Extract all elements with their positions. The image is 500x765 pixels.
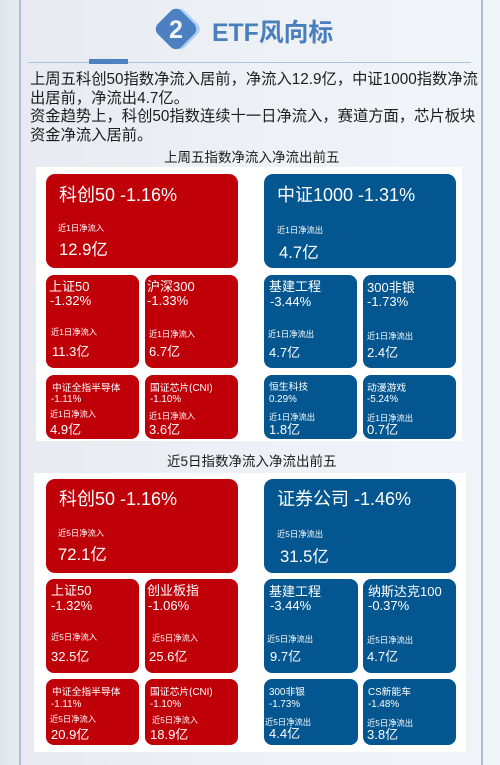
card: 中证1000 1-day: 中证1000 -1.31% [277, 185, 415, 205]
card: 基建工程 5-day: 基建工程 [269, 584, 321, 599]
card: 基建工程 1-day: -3.44% [270, 294, 311, 309]
card: 动漫游戏 1-day [363, 375, 456, 439]
card: 国证芯片 5-day: 18.9亿 [150, 727, 188, 742]
card: 沪深300 1-day [145, 275, 238, 368]
card: 300非银 5-day: 近5日净流出 [265, 717, 311, 727]
summary text: 资金净流入居前。 [30, 127, 152, 144]
card: 沪深300 1-day: 近1日净流入 [149, 329, 195, 339]
card: 300非银 1-day: 近1日净流出 [367, 331, 413, 341]
card: 上证50 1-day: -1.32% [50, 293, 91, 308]
card: 纳斯达克100 5-day: 纳斯达克100 [368, 584, 442, 599]
card: 中证全指半导体 1-day: 4.9亿 [50, 422, 81, 437]
card: 动漫游戏 1-day: 近1日净流出 [367, 413, 413, 423]
summary text: 出居前，净流出4.7亿。 [30, 90, 189, 107]
card: 上证50 5-day [46, 579, 139, 673]
card: 中证全指半导体 5-day [46, 679, 139, 745]
card: 纳斯达克100 5-day [363, 579, 456, 673]
summary text [30, 70, 478, 144]
card: CS新能车 5-day [363, 679, 456, 745]
card: CS新能车 5-day: 近5日净流出 [367, 718, 413, 728]
card: 国证芯片 1-day: 近1日净流入 [149, 411, 195, 421]
card: 上证50 5-day: -1.32% [51, 598, 92, 613]
card: 创业板指 5-day [145, 579, 238, 673]
card: 300非银 1-day [363, 275, 456, 368]
card: 科创50 5-day: 近5日净流入 [58, 528, 104, 538]
card: 上证50 1-day: 上证50 [49, 279, 89, 294]
card: 中证1000 1-day [264, 174, 456, 268]
card: 300非银 5-day: -1.73% [269, 699, 300, 710]
card: 300非银 5-day: 300非银 [269, 687, 305, 698]
card: 上证50 1-day [46, 275, 139, 368]
card: 上证50 5-day: 32.5亿 [51, 649, 89, 664]
card: CS新能车 5-day: 3.8亿 [367, 727, 398, 742]
card: 创业板指 5-day: 近5日净流入 [152, 633, 198, 643]
card: 中证1000 1-day: 近1日净流出 [277, 225, 323, 235]
card: 中证全指半导体 1-day: 近1日净流入 [50, 409, 96, 419]
card: 创业板指 5-day: 25.6亿 [149, 649, 187, 664]
card: 中证全指半导体 1-day: -1.11% [51, 394, 81, 405]
panel: last Friday flows [36, 167, 462, 441]
card: 国证芯片 5-day: 近5日净流入 [152, 715, 198, 725]
card: 上证50 1-day: 近1日净流入 [51, 327, 97, 337]
card: 国证芯片 1-day: 国证芯片(CNI) [150, 383, 213, 394]
card: 300非银 5-day [264, 679, 358, 745]
card: 上证50 5-day: 近5日净流入 [51, 632, 97, 642]
card: 沪深300 1-day: -1.33% [147, 293, 188, 308]
icon: number 2 diamond [156, 8, 200, 50]
card: 基建工程 1-day: 近1日净流出 [268, 329, 314, 339]
card: 证券公司 5-day: 近5日净流出 [277, 529, 323, 539]
card: 中证全指半导体 5-day: 中证全指半导体 [52, 687, 121, 698]
card: 创业板指 5-day: 创业板指 [147, 583, 199, 598]
summary text: 资金趋势上，科创50指数连续十一日净流入，赛道方面，芯片板块 [30, 108, 475, 125]
card: 恒生科技 1-day: 恒生科技 [269, 382, 308, 393]
card: 国证芯片 5-day: 国证芯片(CNI) [150, 687, 213, 698]
card: 纳斯达克100 5-day: 近5日净流出 [367, 635, 413, 645]
card: 中证全指半导体 5-day: 20.9亿 [51, 727, 89, 742]
card: 恒生科技 1-day [264, 375, 357, 439]
card: 科创50 5-day: 72.1亿 [58, 545, 107, 564]
card: 基建工程 5-day [264, 579, 358, 673]
card: 科创50 5-day [46, 479, 238, 573]
card: 中证全指半导体 1-day: 中证全指半导体 [52, 383, 121, 394]
title: ETF风向标 [212, 20, 333, 47]
card: 基建工程 5-day: -3.44% [270, 598, 311, 613]
heading: 5-day top five: 近5日指数净流入净流出前五 [167, 454, 337, 469]
card: 恒生科技 1-day: 0.29% [269, 394, 297, 405]
card: 基建工程 1-day: 基建工程 [269, 279, 321, 294]
card: 动漫游戏 1-day: 0.7亿 [367, 422, 398, 437]
icon: number 2 diamond: 2 [169, 16, 183, 44]
card: 300非银 1-day: 2.4亿 [367, 345, 398, 360]
header divider [28, 62, 471, 63]
card: 上证50 5-day: 上证50 [51, 583, 91, 598]
card: 中证1000 1-day: 4.7亿 [279, 243, 319, 262]
header [28, 8, 471, 64]
card: 纳斯达克100 5-day: -0.37% [368, 598, 409, 613]
heading: last Friday top five: 上周五指数净流入净流出前五 [164, 150, 340, 165]
card: 300非银 1-day: -1.73% [367, 294, 408, 309]
card: 动漫游戏 1-day: 动漫游戏 [367, 383, 406, 394]
card: 基建工程 5-day: 近5日净流出 [267, 634, 313, 644]
card: 基建工程 1-day: 4.7亿 [269, 345, 300, 360]
card: 国证芯片 5-day [145, 679, 238, 745]
card: 科创50 1-day [46, 174, 238, 268]
summary text: 上周五科创50指数净流入居前，净流入12.9亿，中证1000指数净流 [30, 71, 478, 88]
card: 基建工程 1-day [264, 275, 357, 368]
card: 国证芯片 5-day: -1.10% [150, 699, 181, 710]
card: 纳斯达克100 5-day: 4.7亿 [367, 649, 398, 664]
card: 中证全指半导体 5-day: 近5日净流入 [50, 714, 96, 724]
card: 恒生科技 1-day: 近1日净流出 [269, 412, 315, 422]
card: 沪深300 1-day: 6.7亿 [149, 344, 180, 359]
card: 恒生科技 1-day: 1.8亿 [269, 422, 300, 437]
card: 中证全指半导体 5-day: -1.11% [51, 699, 81, 710]
card: 沪深300 1-day: 沪深300 [147, 279, 195, 294]
card: 中证全指半导体 1-day [46, 375, 139, 439]
card: 科创50 1-day: 近1日净流入 [58, 223, 104, 233]
card: 科创50 5-day: 科创50 -1.16% [59, 489, 177, 509]
card: 动漫游戏 1-day: -5.24% [367, 394, 398, 405]
card: 创业板指 5-day: -1.06% [148, 598, 189, 613]
card: CS新能车 5-day: -1.48% [368, 699, 399, 710]
card: 上证50 1-day: 11.3亿 [52, 344, 89, 359]
card: 国证芯片 1-day: 3.6亿 [149, 422, 180, 437]
card: 科创50 1-day: 12.9亿 [59, 240, 108, 259]
card: 国证芯片 1-day [145, 375, 238, 439]
panel: 5-day flows [34, 473, 466, 752]
card: 国证芯片 1-day: -1.10% [150, 394, 181, 405]
card: 科创50 1-day: 科创50 -1.16% [59, 185, 177, 205]
card: 300非银 1-day: 300非银 [367, 280, 415, 295]
card: 基建工程 5-day: 9.7亿 [270, 649, 301, 664]
card: 证券公司 5-day: 证券公司 -1.46% [277, 489, 411, 509]
card: CS新能车 5-day: CS新能车 [368, 687, 411, 698]
card: 证券公司 5-day [264, 479, 456, 573]
card: 300非银 5-day: 4.4亿 [269, 726, 300, 741]
card: 证券公司 5-day: 31.5亿 [280, 547, 329, 566]
